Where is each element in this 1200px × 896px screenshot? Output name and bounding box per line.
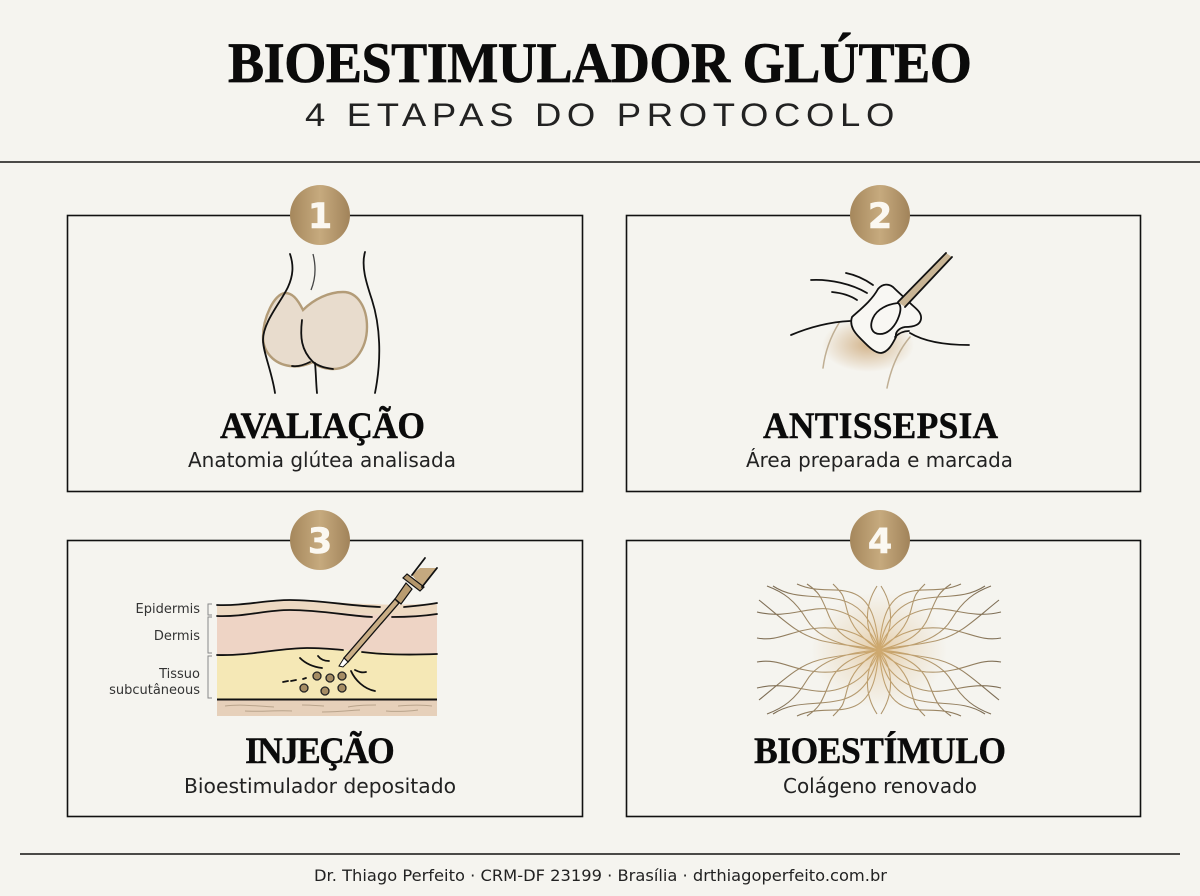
panel: step 3 injeção — [68, 510, 582, 816]
badge 2 — [850, 185, 910, 245]
heading: antissepsia: ANTISSEPSIA — [763, 405, 998, 446]
heading: avaliação: AVALIAÇÃO — [220, 405, 425, 446]
injected deposits — [283, 656, 375, 695]
chart: skin layers — [109, 558, 437, 716]
layer labels: Epidermis — [136, 602, 200, 617]
panel: step 4 bioestímulo — [626, 510, 1140, 816]
badge 4: 4 — [868, 522, 892, 562]
icon: swab on skin — [791, 253, 969, 388]
badge 1: 1 — [308, 197, 332, 237]
title: BIOESTIMULADOR GLÚTEO — [228, 32, 972, 95]
layer labels: Tissuo — [158, 667, 200, 682]
subtitle: 4 ETAPAS DO PROTOCOLO — [305, 98, 894, 133]
panel: step 1 avaliação — [68, 185, 582, 492]
layer labels: subcutâneous — [109, 683, 200, 698]
heading: bioestímulo: BIOESTÍMULO — [754, 730, 1006, 771]
caption: Bioestimulador depositado — [184, 774, 456, 798]
footer: Dr. Thiago Perfeito · CRM-DF 23199 · Brasília · drthiagoperfeito.com.br — [314, 866, 887, 885]
syringe needle — [339, 558, 437, 667]
caption: Anatomia glútea analisada — [188, 448, 456, 472]
heading: injeção: INJEÇÃO — [245, 730, 395, 771]
badge 2: 2 — [868, 197, 892, 237]
layer labels — [109, 602, 212, 698]
badge 4 — [850, 510, 910, 570]
caption: Área preparada e marcada — [746, 447, 1013, 472]
icon: collagen network — [757, 584, 1001, 716]
icon: gluteal anatomy — [263, 252, 379, 393]
layer labels: Dermis — [154, 629, 200, 644]
badge 1 — [290, 185, 350, 245]
panel: step 2 antissepsia — [626, 185, 1140, 492]
badge 3 — [290, 510, 350, 570]
badge 3: 3 — [308, 522, 332, 562]
caption: Colágeno renovado — [783, 774, 977, 798]
